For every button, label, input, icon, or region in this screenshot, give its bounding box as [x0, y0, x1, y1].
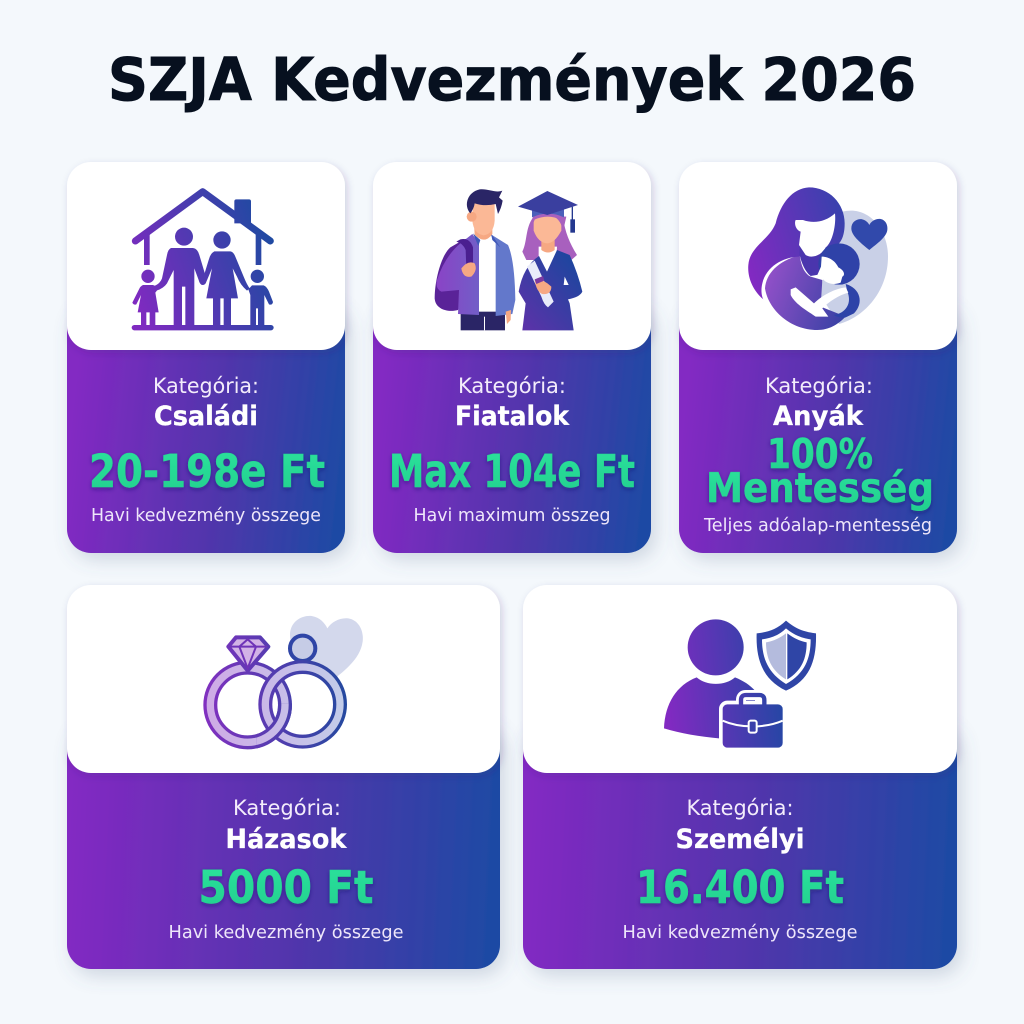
- category label: Kategória:: [153, 374, 259, 398]
- category label: Kategória:: [765, 374, 873, 398]
- icon: person, shield and briefcase: [664, 619, 816, 748]
- category name: Házasok: [226, 824, 347, 855]
- description: Havi kedvezmény összege: [168, 922, 404, 943]
- value: 16.400 Ft: [636, 861, 844, 914]
- title: SZJA Kedvezmények 2026: [108, 45, 916, 114]
- panel: Házasok: [67, 585, 500, 969]
- icon: mother and child: [748, 187, 888, 330]
- description: Havi kedvezmény összege: [91, 505, 321, 526]
- value: Max 104e Ft: [389, 445, 635, 498]
- panel: Családi: [67, 162, 345, 553]
- panel: Személyi: [523, 585, 957, 969]
- category name: Fiatalok: [455, 401, 570, 432]
- panel: Fiatalok: [373, 162, 651, 553]
- category name: Anyák: [773, 401, 864, 432]
- panel: Anyák: [679, 162, 957, 553]
- icon: wedding rings: [210, 616, 363, 742]
- description: Havi maximum összeg: [414, 505, 610, 526]
- category name: Személyi: [676, 824, 804, 855]
- description: Havi kedvezmény összege: [622, 922, 858, 943]
- category label: Kategória:: [686, 796, 794, 820]
- category name: Családi: [154, 401, 258, 432]
- category label: Kategória:: [233, 796, 341, 820]
- value: 5000 Ft: [198, 861, 374, 914]
- description: Teljes adóalap-mentesség: [703, 515, 932, 536]
- category label: Kategória:: [458, 374, 566, 398]
- value: 20-198e Ft: [89, 445, 325, 498]
- value: 100%: [767, 430, 873, 478]
- value line 2: Mentesség: [706, 464, 934, 512]
- icon: family house: [132, 192, 273, 328]
- icon: students: [435, 189, 582, 330]
